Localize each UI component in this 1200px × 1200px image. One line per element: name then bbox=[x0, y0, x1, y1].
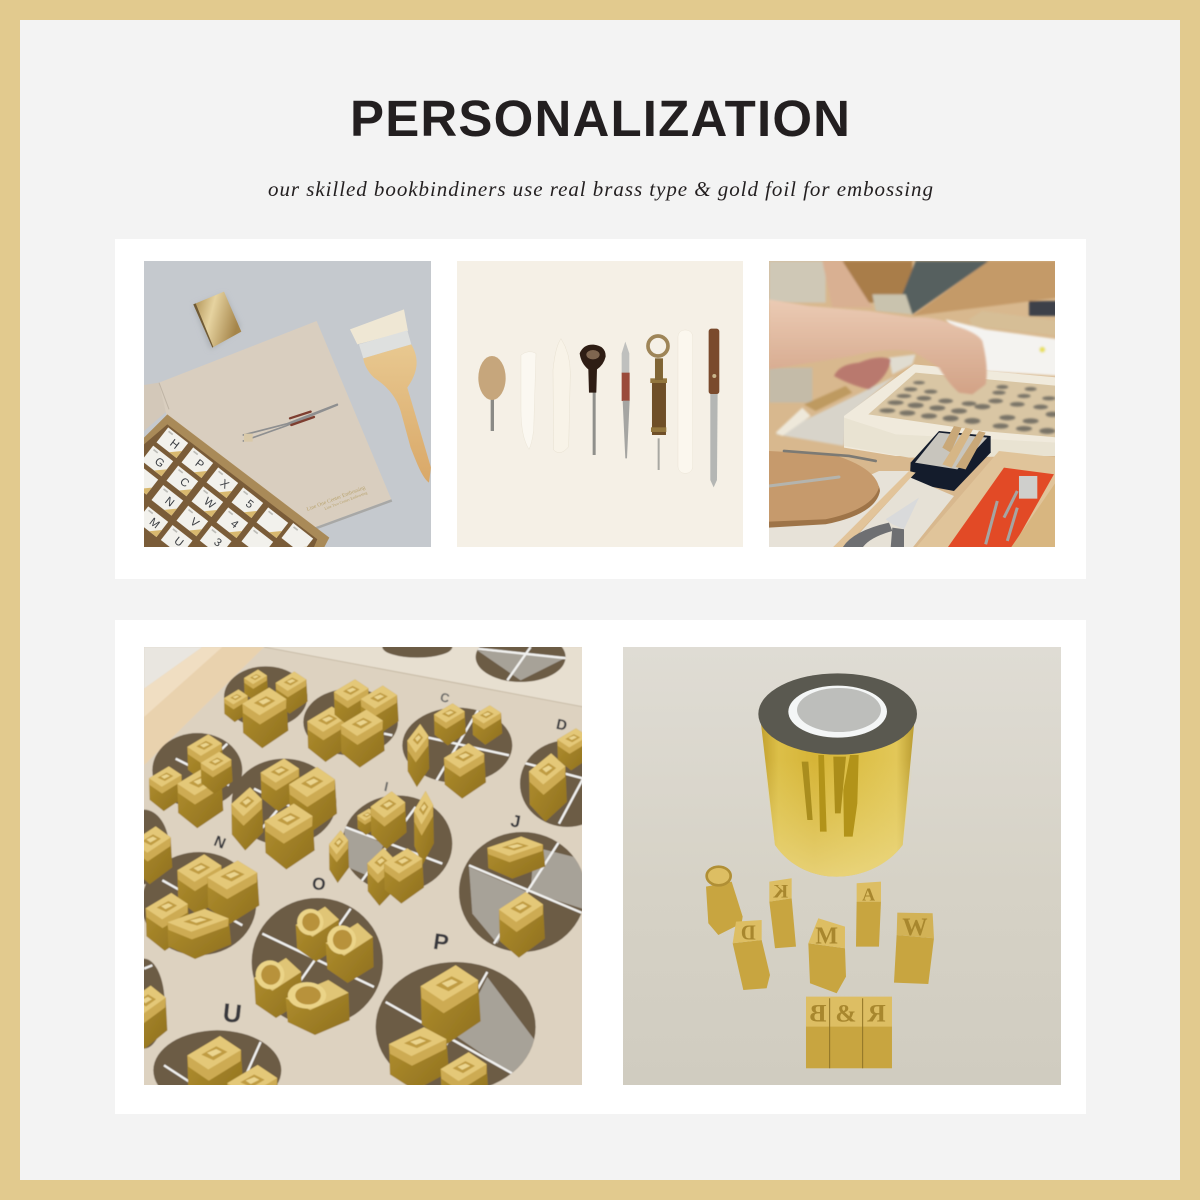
icon: pliers bbox=[842, 498, 919, 548]
lighter hole interiors bbox=[344, 650, 587, 1080]
light table surface under mat bbox=[769, 471, 911, 548]
type tray with letter keys: 3 bbox=[211, 536, 224, 550]
icon: bone folder 2 bbox=[553, 339, 570, 453]
letter block D bbox=[733, 920, 770, 990]
icon: tweezers bbox=[243, 404, 337, 442]
type tray with letter keys: V bbox=[188, 516, 201, 530]
type tray, white box bbox=[844, 364, 1059, 458]
icon: tools on mat bbox=[769, 451, 876, 486]
brass letter blocks bbox=[706, 867, 934, 1068]
type tray with letter keys: 4 bbox=[228, 518, 240, 531]
icon: gold tape roll bbox=[193, 292, 241, 348]
letter block K: K bbox=[773, 881, 788, 902]
printed tray letters bbox=[211, 690, 568, 1029]
photo: brass type sorted in round tray holes bbox=[144, 647, 582, 1085]
type tray with letter keys: C bbox=[177, 476, 191, 490]
letter block O bbox=[706, 867, 743, 935]
icon: hake brush bbox=[350, 309, 431, 483]
letter block K bbox=[769, 878, 796, 948]
type tray with letter keys: N bbox=[162, 495, 176, 510]
printed tray letters: C bbox=[439, 690, 451, 706]
type tray with letter keys: W bbox=[201, 496, 217, 512]
subtitle: our skilled bookbindiners use real brass type & gold foil for embossing bbox=[268, 177, 933, 201]
title: PERSONALIZATION bbox=[350, 90, 850, 147]
tray holes bbox=[144, 647, 582, 1085]
printed tray letters: O bbox=[311, 873, 327, 895]
type tray with letter keys: 5 bbox=[243, 498, 255, 511]
card embossed text: Line Two Center Embossing bbox=[324, 490, 368, 511]
icon: wood handled blade bbox=[709, 329, 719, 487]
worker arm and hand bbox=[769, 299, 987, 394]
type tray with letter keys bbox=[144, 414, 330, 547]
type tray with letter keys: X bbox=[217, 478, 231, 492]
photo: gold foil roll and brass letters on linen bbox=[623, 647, 1061, 1085]
icon: wooden awl bbox=[478, 356, 506, 431]
type tray with letter keys: H bbox=[167, 437, 181, 452]
type tray with letter keys: M bbox=[147, 516, 162, 531]
cork mat bbox=[769, 451, 880, 528]
type tray with letter keys: U bbox=[172, 535, 185, 550]
icon: knife with red scale bbox=[622, 342, 630, 458]
letter block W: W bbox=[902, 913, 928, 941]
letter blocks B, ampersand, R: B bbox=[809, 1000, 826, 1028]
letter blocks B, ampersand, R: & bbox=[835, 1000, 857, 1028]
letter block W bbox=[894, 913, 934, 984]
letter block M bbox=[808, 918, 846, 993]
card embossed text: Line One Center Embossing bbox=[306, 485, 366, 513]
letter block A bbox=[856, 882, 881, 947]
panel: bottom photo strip bbox=[115, 620, 1086, 1133]
printed tray letters: U bbox=[221, 997, 243, 1029]
type tray with letter keys: G bbox=[152, 456, 166, 470]
printed tray letters: I bbox=[383, 779, 390, 794]
printed tray letters: P bbox=[432, 928, 450, 956]
printed tray letters: J bbox=[509, 810, 522, 832]
lower tray with red felt and tools bbox=[832, 451, 1059, 548]
tray dividers bbox=[144, 647, 584, 1087]
icon: dark handled awl bbox=[580, 345, 606, 455]
printed tray letters: D bbox=[555, 717, 568, 735]
letter block A: A bbox=[862, 885, 875, 905]
photo: hand picking type at workbench bbox=[769, 261, 1059, 551]
icon: brass ornate tool bbox=[648, 336, 668, 470]
icon: black box with tools bbox=[910, 426, 991, 491]
icon: gold foil roll bbox=[758, 673, 917, 877]
brass type blocks bbox=[144, 669, 582, 1085]
letter block M: M bbox=[815, 923, 838, 949]
icon: bone folder 3 bbox=[678, 330, 693, 473]
icon: bone folder 1 bbox=[521, 352, 536, 449]
photo: bookbinding tools on cream bbox=[457, 261, 743, 547]
printed tray letters: N bbox=[211, 833, 228, 853]
photo: tape, tweezers, brush and type tray on grey linen bbox=[126, 261, 434, 557]
panel: top photo strip bbox=[115, 239, 1086, 579]
letter block D: D bbox=[741, 922, 756, 944]
letter blocks B, ampersand, R: R bbox=[867, 1000, 886, 1028]
letter blocks B, ampersand, R bbox=[806, 997, 892, 1068]
type tray with letter keys: P bbox=[193, 458, 206, 472]
